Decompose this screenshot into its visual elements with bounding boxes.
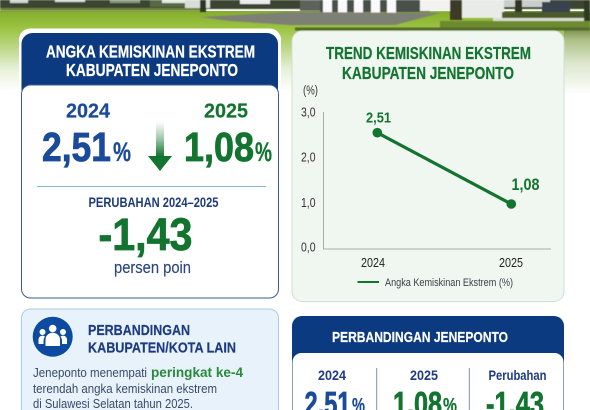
heading	[88, 322, 236, 356]
panel title: ANGKA KEMISKINAN EKSTREM	[46, 42, 255, 62]
panel title: KABUPATEN JENEPONTO	[66, 60, 238, 80]
body	[292, 353, 564, 410]
description: terendah angka kemiskinan ekstrem	[33, 382, 217, 396]
x axis labels: 2024	[361, 255, 385, 270]
chart title	[326, 43, 531, 83]
axes	[324, 112, 551, 249]
change summary: -1,43	[98, 209, 192, 260]
y axis labels: (%)	[303, 82, 318, 98]
change summary: persen poin	[114, 258, 191, 277]
chart card	[292, 31, 564, 302]
heading: KABUPATEN/KOTA LAIN	[88, 340, 236, 356]
column perubahan: Perubahan	[488, 367, 546, 383]
legend: Angka Kemiskinan Ekstrem (%)	[385, 277, 513, 289]
header band	[292, 316, 564, 410]
column 2025	[393, 367, 457, 410]
2025 value: 2025	[204, 100, 248, 122]
x axis labels	[361, 255, 523, 270]
2024 value: %	[113, 137, 131, 167]
chart title: TREND KEMISKINAN EKSTREM	[326, 43, 531, 63]
change summary: PERUBAHAN 2024–2025	[88, 194, 219, 210]
description	[33, 364, 243, 410]
panel: angka kemiskinan ekstrem	[19, 28, 281, 300]
panel: trend line chart	[292, 31, 564, 302]
2024 value: 2,51	[42, 124, 111, 170]
y axis labels: 3,0	[301, 104, 316, 120]
2025 value	[184, 100, 272, 170]
column 2024	[304, 367, 365, 410]
y axis labels: 2,0	[301, 150, 316, 164]
x axis labels: 2025	[499, 255, 523, 270]
data labels	[366, 110, 540, 194]
column 2025: 2025	[410, 367, 438, 383]
description: peringkat ke-4	[151, 364, 243, 380]
heading: PERBANDINGAN JENEPONTO	[332, 329, 508, 346]
panel frame and header	[19, 28, 281, 300]
2025 value: %	[255, 137, 272, 167]
description: Jeneponto menempati	[33, 366, 147, 380]
y axis labels: 0,0	[301, 240, 316, 254]
icon: group of people	[33, 317, 73, 357]
data labels: 1,08	[512, 175, 540, 194]
data labels: 2,51	[366, 110, 391, 126]
2024 value: 2024	[66, 100, 111, 122]
2024 value	[42, 100, 131, 170]
column perubahan	[486, 367, 546, 410]
icon: down arrow	[148, 122, 172, 171]
change summary	[88, 194, 219, 277]
panel title	[46, 42, 255, 80]
card	[22, 309, 278, 410]
data line	[372, 128, 516, 209]
y axis labels: 1,0	[301, 195, 316, 210]
panel: perbandingan jeneponto	[292, 316, 564, 410]
heading: PERBANDINGAN	[88, 322, 190, 339]
chart title: KABUPATEN JENEPONTO	[342, 63, 514, 83]
panel: perbandingan kabupaten/kota lain	[22, 309, 278, 410]
y axis labels	[301, 82, 318, 254]
2025 value: 1,08	[184, 124, 254, 170]
column 2024: 2024	[318, 367, 346, 383]
